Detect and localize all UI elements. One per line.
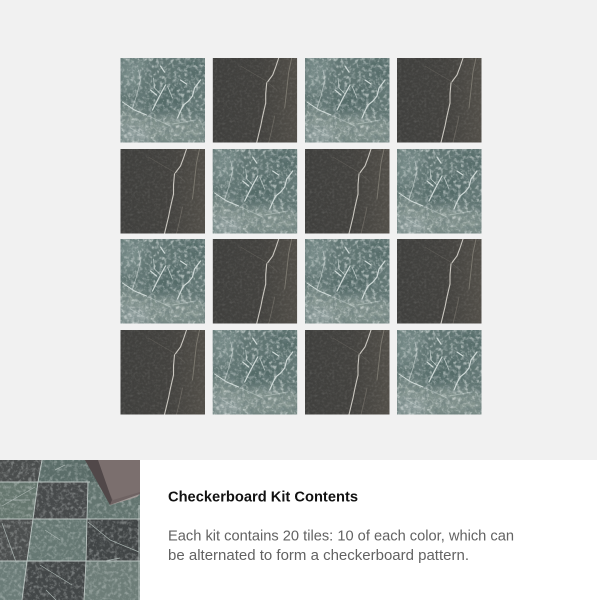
marble veins in photo (2, 465, 139, 600)
tile: dark marble r3c2 (213, 239, 297, 324)
grout lines (0, 460, 140, 600)
page background (0, 0, 597, 460)
description text: Each kit contains 20 tiles: 10 of each color, which can (168, 528, 514, 544)
tile: green marble r2c2 (213, 149, 298, 234)
floor squares (0, 460, 140, 600)
tile: dark marble r2c3 (305, 149, 390, 234)
installed floor photo (0, 460, 140, 600)
tile: dark marble r4c1 (120, 330, 205, 414)
white strip beside photo (140, 460, 600, 600)
heading: Checkerboard Kit Contents (168, 490, 358, 506)
tile: green marble r3c1 (120, 239, 206, 324)
description text: be alternated to form a checkerboard pattern. (168, 548, 469, 564)
tile: green marble r3c3 (305, 239, 390, 324)
wooden block (85, 460, 140, 505)
tile: green marble r4c4 (397, 330, 482, 415)
tile: green marble r2c4 (397, 149, 482, 234)
tile: dark marble r4c3 (305, 330, 390, 414)
tile: dark marble r1c2 (213, 58, 297, 142)
tile: green marble r4c2 (213, 330, 298, 415)
tile: dark marble r1c4 (397, 58, 482, 142)
tile: green marble r1c3 (305, 58, 390, 143)
tile: dark marble r2c1 (120, 149, 205, 234)
tile: green marble r1c1 (120, 58, 206, 143)
tile: dark marble r3c4 (397, 239, 482, 324)
checkerboard tile grid (120, 58, 482, 415)
